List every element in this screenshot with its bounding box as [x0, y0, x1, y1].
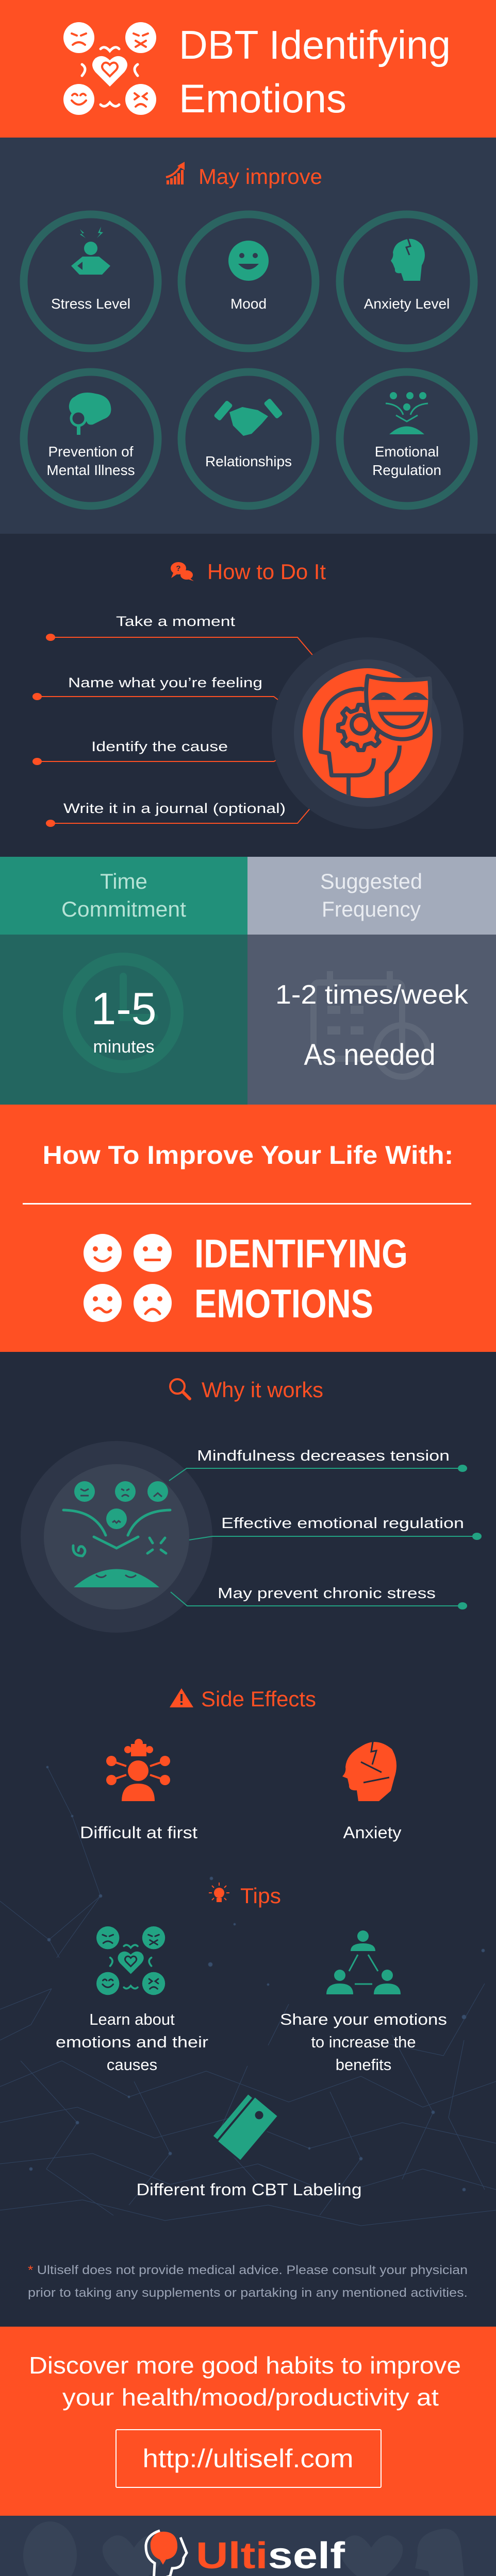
circle: Emotional Regulation: Regulation	[372, 462, 441, 478]
heading: Side Effects: Side Effects	[201, 1687, 316, 1711]
circle: Emotional Regulation: Emotional	[375, 444, 439, 460]
list: why it works: May prevent chronic stress	[218, 1585, 436, 1602]
steps list: Name what you’re feeling	[68, 675, 262, 690]
icon: clock background	[63, 953, 184, 1073]
circle: Anxiety Level: Anxiety Level	[364, 296, 450, 312]
disclaimer: * Ultiself does not provide medical advice. Please consult your physician	[28, 2263, 468, 2277]
icon: four emotion faces	[84, 1234, 172, 1322]
panel: Suggested Frequency: As needed	[304, 1038, 435, 1072]
circle: Mood	[181, 214, 316, 348]
network background pattern	[0, 1766, 496, 2226]
list: why it works	[169, 1448, 482, 1609]
circle: Anxiety Level	[340, 214, 474, 348]
backgrounds	[0, 0, 496, 138]
tip: Share your emotions: to increase the	[311, 2033, 416, 2051]
tip: Learn about emotions: Learn about	[89, 2010, 175, 2028]
header icon: emotions around heart	[63, 22, 156, 115]
circle: Emotional Regulation	[340, 372, 474, 506]
heading: Tips	[209, 1883, 281, 1908]
side effect: Anxiety	[342, 1739, 401, 1842]
tip: Learn about emotions: emotions and their	[56, 2033, 208, 2051]
banner: How To Improve Your Life With	[23, 1141, 471, 1326]
icon: emotions over calm face	[21, 1441, 212, 1633]
tip: Share your emotions	[280, 1930, 447, 2074]
side effect: Difficult at first	[80, 1739, 197, 1842]
steps list	[32, 614, 320, 827]
disclaimer	[28, 2263, 468, 2300]
disclaimer: prior to taking any supplements or partaking in any mentioned activities.	[28, 2286, 468, 2300]
panel: Suggested Frequency	[275, 869, 469, 1077]
icon: head with gear and theatre mask	[272, 637, 464, 829]
circle: Mood: Mood	[230, 296, 267, 312]
title: DBT Identifying	[179, 22, 451, 67]
tip: Different from CBT Labeling: Different from CBT Labeling	[136, 2180, 362, 2199]
panel: Suggested Frequency: 1-2 times/week	[275, 980, 469, 1010]
side effect: Anxiety: Anxiety	[343, 1823, 401, 1842]
heading: May improve: May improve	[199, 164, 322, 189]
panel: Time Commitment: Time	[100, 869, 147, 893]
banner: How To Improve Your Life With: EMOTIONS	[194, 1281, 373, 1326]
tip: Learn about emotions: causes	[107, 2056, 157, 2074]
heading: How to Do It: How to Do It	[207, 560, 326, 584]
title: Emotions	[179, 76, 346, 121]
url button	[116, 2430, 381, 2487]
circle: Prevention of Mental Illness: Mental Illness	[46, 462, 135, 478]
steps list: Identify the cause	[91, 739, 228, 754]
call to action: your health/mood/productivity at	[62, 2384, 439, 2411]
side effect: Difficult at first: Difficult at first	[80, 1823, 197, 1842]
steps list: Take a moment	[116, 614, 236, 629]
banner: How To Improve Your Life With: How To Improve Your Life With:	[42, 1141, 454, 1170]
heading: Tips: Tips	[240, 1884, 281, 1908]
panel: Suggested Frequency: Frequency	[322, 897, 421, 921]
banner: How To Improve Your Life With: IDENTIFYING	[194, 1231, 408, 1276]
circle: Prevention of Mental Illness	[24, 372, 158, 506]
list: why it works: Effective emotional regulation	[221, 1515, 464, 1532]
title	[179, 22, 451, 121]
panel: may improve circles	[24, 214, 474, 506]
circle: Prevention of Mental Illness: Prevention of	[48, 444, 134, 460]
circle: Relationships	[181, 372, 316, 506]
icon: calendar background	[313, 971, 428, 1077]
footer logo: Ulti self	[196, 2535, 345, 2576]
steps list: Write it in a journal (optional)	[63, 801, 286, 816]
call to action	[29, 2352, 461, 2487]
tip: Different from CBT Labeling	[136, 2092, 362, 2199]
url button: http://ultiself.com	[142, 2444, 354, 2473]
circle: Relationships: Relationships	[205, 453, 292, 469]
tip: Share your emotions: Share your emotions	[280, 2010, 447, 2028]
tip: Share your emotions: benefits	[336, 2056, 391, 2074]
tip: Learn about emotions	[56, 1926, 208, 2074]
call to action: Discover more good habits to improve	[29, 2352, 461, 2379]
panel: Suggested Frequency: Suggested	[320, 869, 422, 893]
panel: Time Commitment: 1-5	[91, 983, 157, 1034]
circle: Stress Level	[24, 214, 158, 348]
footer logo	[23, 2521, 464, 2576]
circle: Stress Level: Stress Level	[51, 296, 130, 312]
panel: Time Commitment: minutes	[93, 1037, 155, 1057]
heading: Why it works: Why it works	[202, 1378, 323, 1402]
panel: Time Commitment	[61, 869, 186, 1073]
list: why it works: Mindfulness decreases tension	[197, 1448, 450, 1464]
heading: How to Do It: ?	[176, 564, 181, 573]
panel: Time Commitment: Commitment	[61, 897, 186, 921]
